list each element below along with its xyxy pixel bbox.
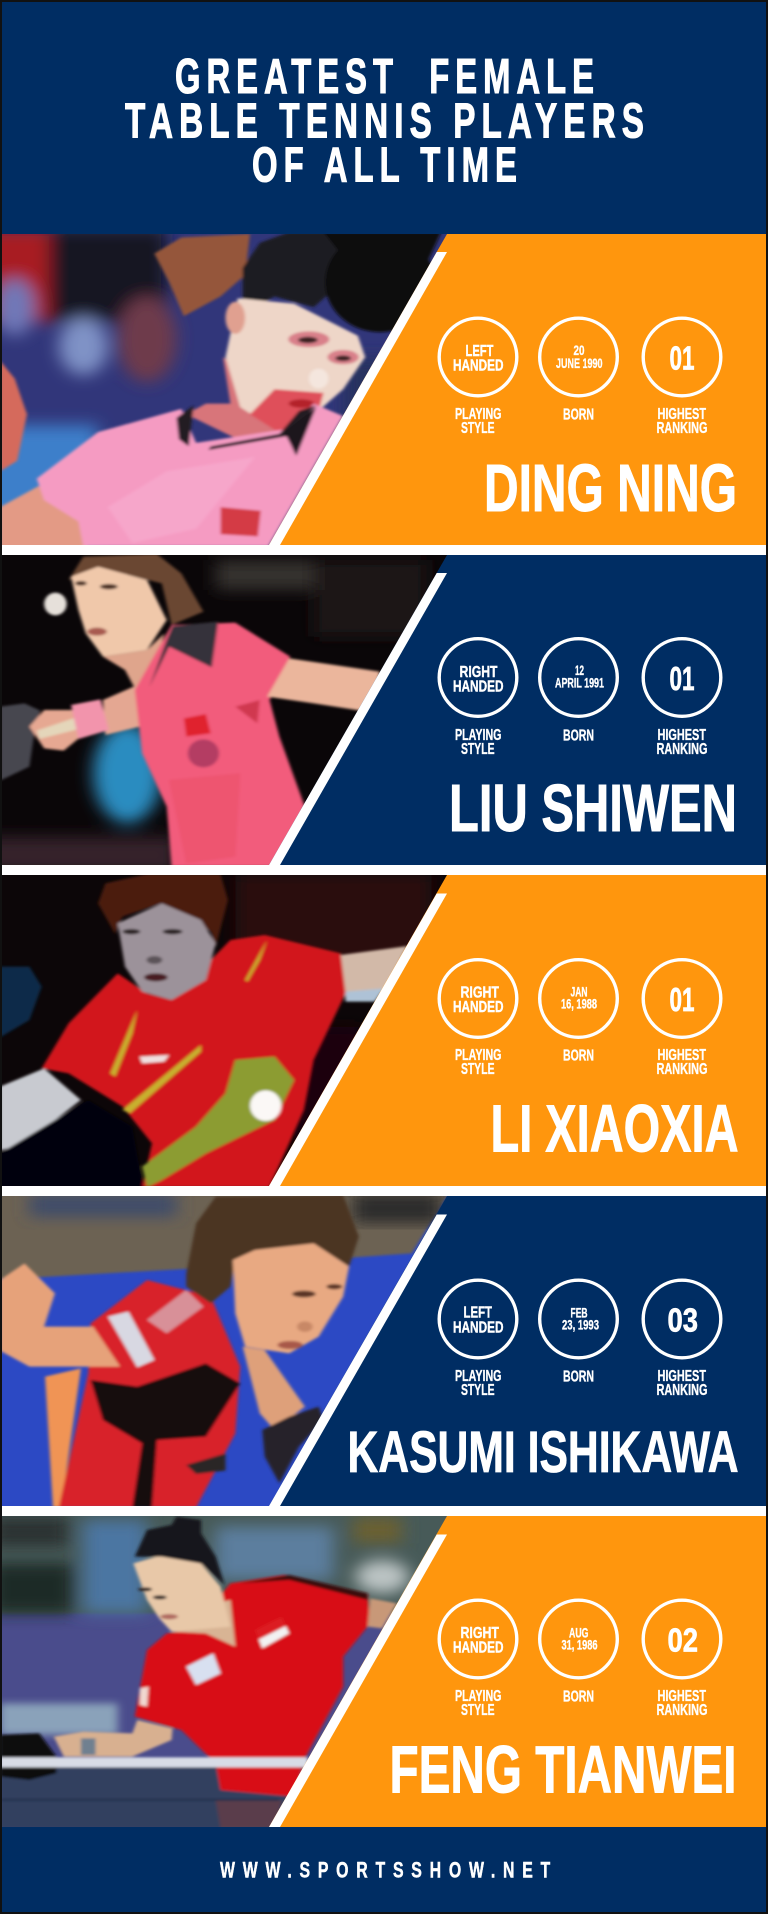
stat: playing style: PLAYING bbox=[455, 1047, 502, 1064]
stat: highest ranking: 01 bbox=[670, 660, 694, 697]
stat: highest ranking: 03 bbox=[668, 1301, 698, 1338]
stat: highest ranking: RANKING bbox=[656, 741, 708, 758]
footer banner bbox=[2, 1827, 766, 1912]
stat: born: 31, 1986 bbox=[562, 1638, 598, 1652]
stat: playing style: STYLE bbox=[461, 1382, 494, 1399]
stat: highest ranking bbox=[643, 960, 721, 1078]
stat: playing style: RIGHT bbox=[460, 984, 499, 1002]
stats and name bbox=[348, 1280, 738, 1485]
stat: playing style: STYLE bbox=[461, 1702, 494, 1719]
stat: highest ranking: HIGHEST bbox=[658, 1688, 706, 1705]
stat: playing style: STYLE bbox=[461, 1061, 494, 1078]
stat: born: BORN bbox=[563, 1047, 594, 1064]
photo: Ding Ning bbox=[0, 229, 462, 557]
stat: highest ranking bbox=[643, 318, 721, 437]
stat: born: 12 bbox=[575, 663, 584, 678]
navy info panel bbox=[269, 555, 766, 865]
diagonal white stripe bbox=[269, 1534, 447, 1827]
stat: highest ranking bbox=[643, 1600, 721, 1719]
panel: Ding Ning bbox=[0, 229, 766, 557]
stat: playing style: PLAYING bbox=[455, 1368, 502, 1385]
stat: playing style bbox=[439, 1600, 517, 1719]
stat: playing style: STYLE bbox=[461, 420, 494, 437]
stat: playing style bbox=[439, 1280, 517, 1399]
stat: born bbox=[540, 1280, 617, 1385]
stat: highest ranking: 01 bbox=[670, 981, 694, 1018]
stat: born: FEB bbox=[570, 1306, 588, 1320]
stat: highest ranking: HIGHEST bbox=[658, 727, 706, 744]
stat: highest ranking bbox=[643, 1280, 721, 1399]
title: OF ALL TIME bbox=[252, 138, 523, 192]
navy info panel bbox=[269, 1196, 766, 1506]
stat: playing style: PLAYING bbox=[455, 727, 502, 744]
stats and name bbox=[439, 318, 737, 526]
stat: born: BORN bbox=[563, 1368, 594, 1385]
photo: Liu Shiwen bbox=[0, 554, 462, 873]
stats and name bbox=[439, 639, 737, 846]
stat: playing style: RIGHT bbox=[460, 1625, 499, 1642]
stat: playing style: PLAYING bbox=[455, 406, 502, 423]
stat: playing style: RIGHT bbox=[460, 664, 498, 681]
stat: playing style: HANDED bbox=[453, 1320, 504, 1337]
stat: highest ranking: HIGHEST bbox=[658, 1368, 706, 1385]
stats and name bbox=[439, 960, 738, 1166]
stat: born: AUG bbox=[569, 1626, 588, 1640]
photo: Li Xiaoxia bbox=[0, 873, 462, 1187]
stat: playing style bbox=[439, 639, 517, 758]
stat: highest ranking: HIGHEST bbox=[658, 1047, 706, 1064]
diagonal white stripe bbox=[269, 252, 447, 545]
stat: highest ranking: RANKING bbox=[656, 1382, 708, 1399]
stat: born: JUNE 1990 bbox=[556, 356, 602, 371]
stat: born: APRIL 1991 bbox=[555, 676, 604, 690]
panel: Kasumi Ishikawa bbox=[0, 1190, 766, 1507]
diagonal white stripe bbox=[269, 573, 447, 865]
header banner bbox=[2, 2, 766, 234]
stat: playing style: HANDED bbox=[453, 679, 504, 696]
stat: born: 20 bbox=[574, 343, 584, 358]
orange info panel bbox=[269, 875, 766, 1186]
panel: Liu Shiwen bbox=[0, 554, 766, 873]
stat: born: 23, 1993 bbox=[562, 1318, 599, 1332]
stat: born: BORN bbox=[563, 1688, 594, 1705]
stat: born bbox=[540, 639, 617, 744]
photo: Feng Tianwei bbox=[0, 1513, 462, 1828]
website url: WWW.SPORTSSHOW.NET bbox=[220, 1858, 558, 1882]
stat: playing style: HANDED bbox=[453, 358, 504, 375]
stat: born: BORN bbox=[563, 406, 594, 423]
stat: highest ranking: 02 bbox=[668, 1621, 698, 1658]
stat: highest ranking: RANKING bbox=[656, 1061, 708, 1078]
diagonal white stripe bbox=[269, 1214, 447, 1506]
stat: born bbox=[540, 960, 617, 1064]
panel: Li Xiaoxia bbox=[0, 873, 766, 1187]
stat: highest ranking: HIGHEST bbox=[658, 406, 706, 423]
stat: highest ranking: RANKING bbox=[656, 1702, 708, 1719]
orange info panel bbox=[269, 234, 766, 545]
stat: born: 16, 1988 bbox=[561, 996, 597, 1012]
panel: Feng Tianwei bbox=[0, 1513, 766, 1828]
stats and name bbox=[390, 1600, 736, 1808]
stat: playing style: LEFT bbox=[464, 1304, 492, 1322]
stat: playing style: HANDED bbox=[453, 999, 504, 1016]
stat: born bbox=[540, 318, 617, 423]
diagonal white stripe bbox=[269, 894, 447, 1186]
stat: playing style: PLAYING bbox=[455, 1688, 502, 1705]
stat: highest ranking bbox=[643, 639, 721, 758]
stat: highest ranking: RANKING bbox=[656, 420, 708, 437]
stat: born: BORN bbox=[563, 727, 594, 744]
stat: born: JAN bbox=[570, 984, 588, 1000]
orange info panel bbox=[269, 1516, 766, 1827]
stat: born bbox=[540, 1600, 617, 1705]
photo: Kasumi Ishikawa bbox=[0, 1190, 462, 1507]
stat: playing style bbox=[439, 960, 517, 1078]
stat: playing style bbox=[439, 318, 517, 437]
stat: playing style: HANDED bbox=[453, 1640, 504, 1657]
title bbox=[125, 50, 650, 192]
stat: playing style: LEFT bbox=[466, 343, 494, 360]
stat: playing style: STYLE bbox=[461, 741, 494, 758]
stat: highest ranking: 01 bbox=[670, 339, 694, 376]
